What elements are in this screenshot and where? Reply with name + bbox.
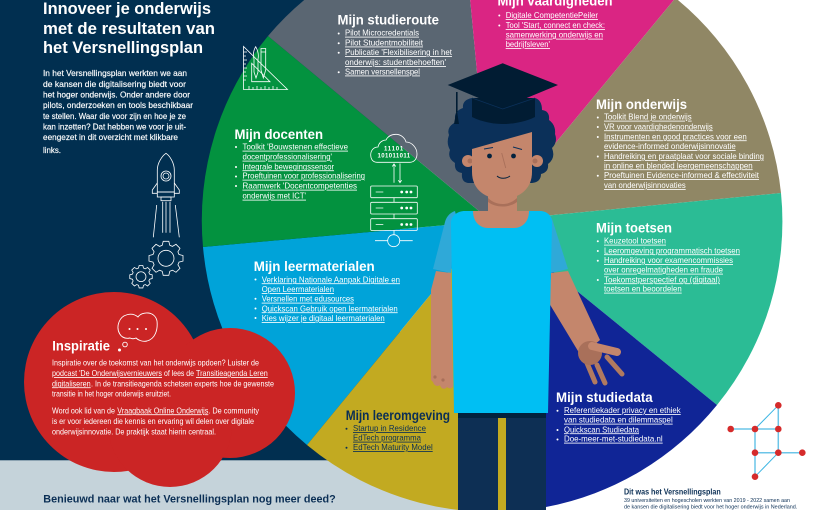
list: leeromgeving links: Startup in Residence: [353, 423, 426, 433]
icon: thought bubble: [118, 313, 157, 352]
list: onderwijs links: Proeftuinen Evidence-informed & effectiviteit: [604, 170, 760, 180]
list: vaardigheden links: samenwerking onderwijs en: [506, 30, 603, 40]
sleeves: [433, 211, 568, 273]
icon: small gear: [130, 265, 152, 288]
list: toetsen links: Leeromgeving programmatisch toetsen: [604, 245, 740, 255]
list: toetsen links: Toekomstperspectief op (digitaal): [604, 274, 720, 284]
bottom question: Benieuwd naar wat het Versnellingsplan nog meer deed?: [43, 494, 336, 506]
inspiratie text: Inspiratie over de toekomst van het onderwijs opdoen? Luister de: [52, 359, 259, 368]
bottom strip: [0, 460, 480, 510]
list: studieroute links: Pilot Microcredentials: [345, 28, 419, 38]
list: leermaterialen links: Quickscan Gebruik open leermaterialen: [262, 303, 398, 313]
list: onderwijs links: evidence-informed onderwijsinnovatie: [604, 141, 736, 151]
inspiratie text: . De community: [208, 406, 260, 415]
list: leeromgeving links: [346, 423, 433, 452]
list: toetsen links: toetsen en beoordelen: [604, 284, 682, 294]
intro text: te stellen. Waar die voor zijn en hoe je ze: [43, 111, 186, 121]
icon: cloud and servers: 101011011: [378, 154, 411, 160]
title: [43, 0, 215, 57]
list: docenten links: Integrale bewegingssensor: [242, 161, 334, 171]
text: dit was het versnellingsplan: Dit was het Versnellingsplan: [624, 487, 721, 497]
icon: rocket: [152, 153, 179, 237]
intro text: de kansen die digitalisering biedt voor: [43, 79, 186, 89]
legs: [458, 413, 546, 510]
list: leermaterialen links: Open Leermaterialen: [262, 284, 334, 294]
list: onderwijs links: [597, 112, 764, 190]
icon: cloud and servers: 11101: [384, 146, 404, 152]
list: vaardigheden links: bedrijfsleven': [506, 39, 550, 49]
intro text: [43, 68, 193, 155]
intro text: links.: [43, 145, 61, 155]
inspiratie text: onderwijsinnovatie. De praktijk staat hierin centraal.: [52, 428, 216, 437]
text: dit was het versnellingsplan: 39 universiteiten en hogescholen werkten van 2019 - 2022 samen aan: [624, 498, 790, 504]
panel: mijn vaardigheden: [464, 0, 676, 221]
panel: mijn studieroute: [268, 0, 491, 221]
panel: mijn studiedata: [491, 221, 717, 507]
list: vaardigheden links: [498, 10, 605, 49]
list: toetsen links: [597, 236, 740, 294]
list: toetsen links: over onregelmatigheden en fraude: [604, 265, 723, 275]
panel: mijn leeromgeving: [307, 221, 546, 510]
icon: cloud and servers: [371, 134, 417, 247]
list: docenten links: [235, 142, 365, 201]
list: studieroute links: onderwijs: studentbehoeften': [345, 57, 446, 67]
list: studiedata links: Doe-meer-met-studiedata.nl: [564, 434, 663, 444]
list: toetsen links: Handreiking voor examencommissies: [604, 255, 733, 265]
list: onderwijs links: Toolkit Blend je onderwijs: [604, 112, 692, 122]
heading: mijn studieroute: Mijn studieroute: [338, 12, 439, 28]
intro text: In het Versnellingsplan werkten we aan: [43, 68, 187, 78]
panel: inspiratie cloud: [24, 292, 295, 487]
list: studiedata links: Quickscan Studiedata: [564, 424, 639, 434]
intro text: eengezet in dit overzicht met klikbare: [43, 132, 178, 142]
title: het Versnellingsplan: [43, 38, 203, 57]
heading: mijn studiedata: Mijn studiedata: [556, 389, 653, 405]
list: studiedata links: Referentiekader privacy en ethiek: [564, 405, 681, 415]
shirt: [451, 211, 552, 413]
inspiratie text: podcast 'De Onderwijsvernieuwers: [52, 368, 162, 378]
intro text: pilots, onderzoeken en tools beschikbaar: [43, 100, 193, 110]
list: onderwijs links: Instrumenten en good practices voor een: [604, 131, 747, 141]
inspiratie text: of lees de: [164, 369, 194, 378]
icon: network graph: [727, 402, 806, 480]
list: onderwijs links: in online en blended leergemeenschappen: [604, 160, 753, 170]
list: onderwijs links: van onderwijsinnovaties: [604, 180, 686, 190]
heading: mijn toetsen: Mijn toetsen: [596, 220, 672, 236]
navy background: [0, 0, 400, 460]
list: onderwijs links: Handreiking en praatplaat voor sociale binding: [604, 151, 764, 161]
list: studiedata links: van studiedata en dilemmaspel: [564, 415, 673, 425]
list: vaardigheden links: Digitale CompetentiePeiler: [506, 10, 598, 20]
person: [431, 63, 622, 510]
title: met de resultaten van: [43, 19, 215, 38]
neck: [488, 190, 517, 214]
heading: mijn leermaterialen: Mijn leermaterialen: [254, 258, 375, 274]
heading: mijn leeromgeving: Mijn leeromgeving: [346, 407, 450, 423]
inspiratie text: Transitieagenda Leren: [196, 368, 268, 378]
inspiratie text: digitaliseren: [52, 378, 91, 388]
panel: mijn leermaterialen: [203, 221, 491, 445]
inspiratie text: is er voor iedereen die kennis en ervaring wil delen over digitale: [52, 417, 254, 426]
inspiratie text: [52, 359, 274, 437]
heading: mijn onderwijs: Mijn onderwijs: [596, 96, 687, 112]
list: studiedata links: [556, 405, 681, 444]
list: docenten links: docentprofessionalisering': [242, 152, 332, 162]
list: studieroute links: Publicatie 'Flexibilisering in het: [345, 47, 453, 57]
heading: inspiratie: Inspiratie: [52, 338, 110, 354]
icon: large gear: [149, 241, 183, 275]
list: leermaterialen links: Versnellen met edusources: [262, 294, 354, 304]
neck shadow: [488, 198, 517, 206]
right arm and hand: [549, 271, 622, 383]
cap: [448, 63, 558, 124]
list: docenten links: Raamwerk 'Docentcompetenties: [242, 181, 357, 191]
facial features: [484, 147, 522, 178]
list: leeromgeving links: EdTech Maturity Model: [353, 442, 433, 452]
list: toetsen links: Keuzetool toetsen: [604, 236, 666, 246]
list: studieroute links: [338, 28, 453, 76]
icon: ruler and pencils: [244, 46, 288, 90]
intro text: kan inzetten? Dat hebben we voor je uit-: [43, 122, 186, 132]
inspiratie text: Word ook lid van de: [52, 406, 115, 415]
panel: mijn toetsen: [491, 193, 782, 405]
list: vaardigheden links: Tool 'Start, connect en check:: [506, 20, 605, 30]
inspiratie text: transitie in het hoger onderwijs eruitziet.: [52, 390, 171, 399]
list: docenten links: Toolkit 'Bouwstenen effectieve: [242, 142, 348, 152]
ears: [462, 155, 543, 167]
heading: mijn docenten: Mijn docenten: [234, 126, 323, 142]
inspiratie text: Vraagbaak Online Onderwijs: [117, 405, 208, 415]
face: [472, 132, 532, 199]
list: leermaterialen links: Verklaring Nationale Aanpak Digitale en: [262, 274, 400, 284]
list: docenten links: Proeftuinen voor professionalisering: [242, 171, 365, 181]
list: leermaterialen links: [254, 274, 400, 323]
intro text: het hoger onderwijs. Onder andere door: [43, 90, 190, 100]
panel: mijn docenten: [202, 36, 491, 247]
left arm: [431, 271, 453, 389]
inspiratie text: . In de transitieagenda schetsen experts hoe de gewenste: [91, 379, 274, 388]
list: docenten links: onderwijs met ICT': [242, 191, 306, 201]
hair: [448, 98, 556, 183]
list: leeromgeving links: EdTech programma: [353, 433, 421, 443]
list: onderwijs links: VR voor vaardighedenonderwijs: [604, 121, 713, 131]
neck opening: [473, 211, 529, 228]
cloud shape: [24, 292, 295, 487]
panel: mijn onderwijs: [491, 0, 781, 221]
list: leermaterialen links: Kies wijzer je digitaal leermaterialen: [262, 313, 385, 323]
list: studieroute links: Pilot Studentmobiliteit: [345, 38, 424, 48]
text: dit was het versnellingsplan: [624, 487, 798, 510]
list: studieroute links: Samen versnellenspel: [345, 66, 420, 76]
